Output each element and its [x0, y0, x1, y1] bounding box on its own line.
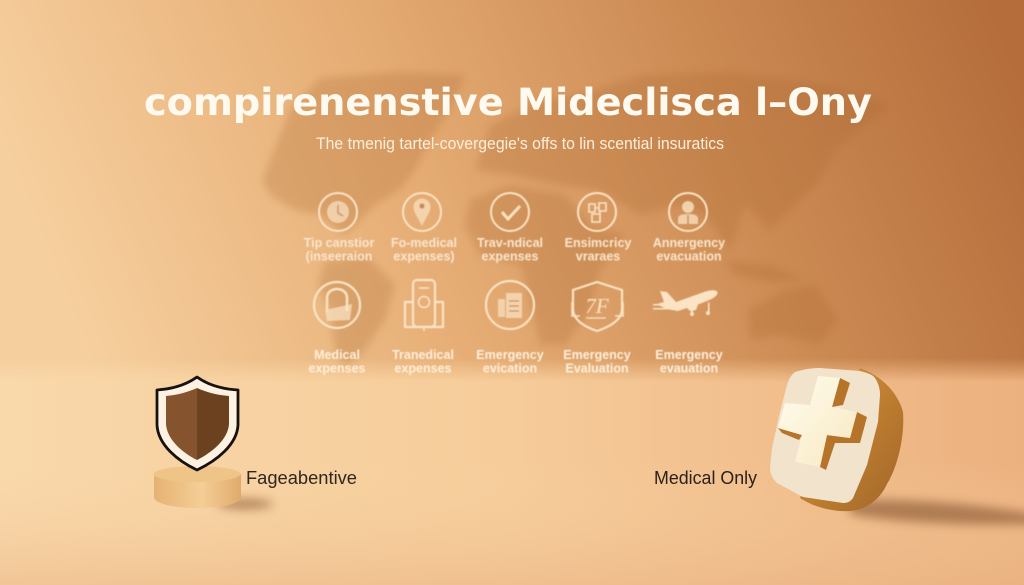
icon: person [669, 193, 707, 231]
label: emergency: vraraes [576, 250, 620, 264]
labels row 2 [309, 348, 723, 376]
icon: documents [578, 193, 616, 231]
icon: shield emblem [572, 282, 623, 331]
label: emergency evacuation: Annergency [653, 236, 725, 250]
icon: document sheets [486, 281, 534, 329]
labels row 1 [304, 236, 725, 264]
label: emergency evacuation: evacuation [656, 250, 722, 264]
label: medical expenses: expenses [309, 362, 366, 376]
label: emergency: Ensimcricy [565, 236, 631, 250]
cross [778, 376, 867, 470]
icon: airplane [653, 290, 718, 316]
icon: check mark [491, 193, 529, 231]
label: trip cancellation: Tip canstior [304, 236, 374, 250]
label: medical only: Medical Only [654, 468, 757, 488]
world map [262, 72, 890, 372]
label: medical expenses: expenses) [393, 250, 455, 264]
title: compirenenstive Mideclisca l–Ony [144, 81, 872, 124]
icon: clock [319, 193, 357, 231]
label: emergency evaluation: Evaluation [565, 362, 629, 376]
pedestal [154, 466, 241, 508]
label: emergency evaluation: evauation [660, 362, 718, 376]
shield on pedestal [154, 377, 273, 509]
label: comprehensive: Fageabentive [246, 468, 357, 488]
background floor [0, 355, 1024, 585]
subtitle: The tmenig tartel-covergegie's offs to lin scential insuratics [316, 134, 724, 153]
icon: shield emblem: 7F [585, 294, 609, 318]
label: trip cancellation: (inseeraion [306, 250, 372, 264]
icon: shield [157, 377, 238, 470]
label: emergency evaluation: Emergency [563, 348, 631, 362]
icon row 1 [319, 193, 707, 231]
block side [800, 368, 903, 511]
icon row 2 [314, 280, 718, 331]
medical cross block [770, 368, 1024, 525]
label: travel medical expenses: expenses [395, 362, 452, 376]
background wall [0, 0, 1024, 385]
icon: luggage lock [314, 282, 360, 328]
label: emergency evacation: evication [483, 362, 537, 376]
icon: smartphone [405, 280, 443, 331]
label: travel medical expenses: Trav-ndical [477, 236, 543, 250]
icon: location pin [403, 193, 441, 231]
label: emergency evacation: Emergency [476, 348, 544, 362]
label: travel medical expenses: Tranedical [392, 348, 454, 362]
label: medical expenses: Fo-medical [391, 236, 457, 250]
label: medical expenses: Medical [314, 348, 360, 362]
block face [770, 368, 880, 503]
label: emergency evaluation: Emergency [655, 348, 723, 362]
label: travel medical expenses: expenses [482, 250, 539, 264]
